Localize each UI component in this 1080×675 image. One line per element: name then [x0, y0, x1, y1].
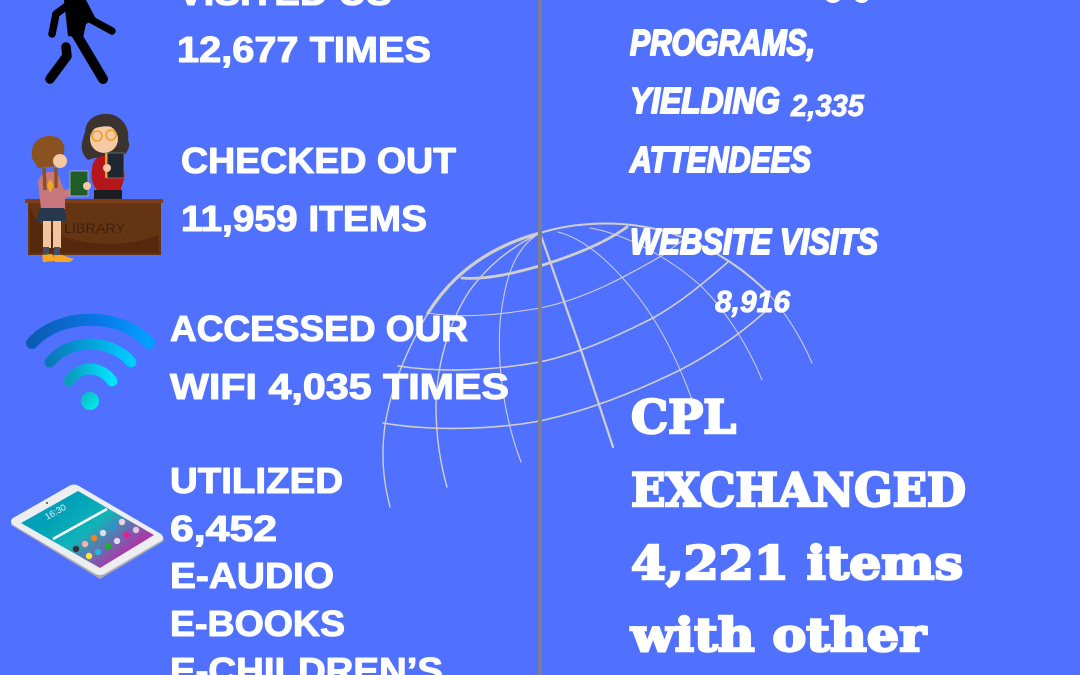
stat: interlibrary exchange	[630, 390, 966, 662]
stat: programs	[629, 0, 868, 180]
stat: website visits	[630, 221, 878, 319]
stat: interlibrary exchange: 4,221 items	[631, 536, 963, 590]
center divider	[538, 0, 542, 675]
stat: visits: 12,677 TIMES	[177, 29, 431, 70]
stat: programs: YIELDING	[630, 80, 780, 121]
stat: checkouts: CHECKED OUT	[181, 140, 456, 181]
stat: checkouts	[181, 140, 456, 239]
right stats text	[629, 0, 966, 662]
stat: checkouts: 11,959 ITEMS	[181, 198, 427, 239]
stat: digital items: E-BOOKS	[170, 603, 345, 644]
stat: digital items: 6,452	[170, 508, 277, 549]
globe outline	[383, 224, 812, 507]
icon: tablet	[11, 484, 164, 579]
desk	[25, 199, 163, 255]
stat: wifi	[170, 308, 509, 407]
stat: digital items: E-AUDIO	[170, 555, 334, 596]
icon: library desk with librarian and child	[25, 114, 163, 262]
stat: wifi: WIFI 4,035 TIMES	[170, 366, 509, 407]
icon: tablet: 16:30	[43, 502, 68, 522]
left stats text	[170, 0, 509, 675]
stat: interlibrary exchange: with other	[630, 608, 927, 662]
stat: website visits: WEBSITE VISITS	[630, 221, 878, 262]
icon: wifi	[32, 320, 149, 410]
stat: digital items	[170, 460, 443, 675]
librarian	[82, 114, 129, 199]
icon: walking person	[50, 0, 112, 79]
stat: interlibrary exchange: CPL	[631, 390, 736, 444]
stat: programs: ATTENDEES	[629, 139, 811, 180]
stat: visits	[177, 0, 431, 70]
stat: wifi: ACCESSED OUR	[170, 308, 468, 349]
stat: interlibrary exchange: EXCHANGED	[631, 463, 966, 517]
stat: programs: 2,335	[790, 88, 865, 123]
stat: website visits: 8,916	[715, 284, 791, 319]
child	[32, 136, 91, 262]
desk: LIBRARY	[64, 220, 126, 236]
stat: digital items: UTILIZED	[170, 460, 343, 501]
stat: programs: PROGRAMS,	[630, 22, 815, 63]
